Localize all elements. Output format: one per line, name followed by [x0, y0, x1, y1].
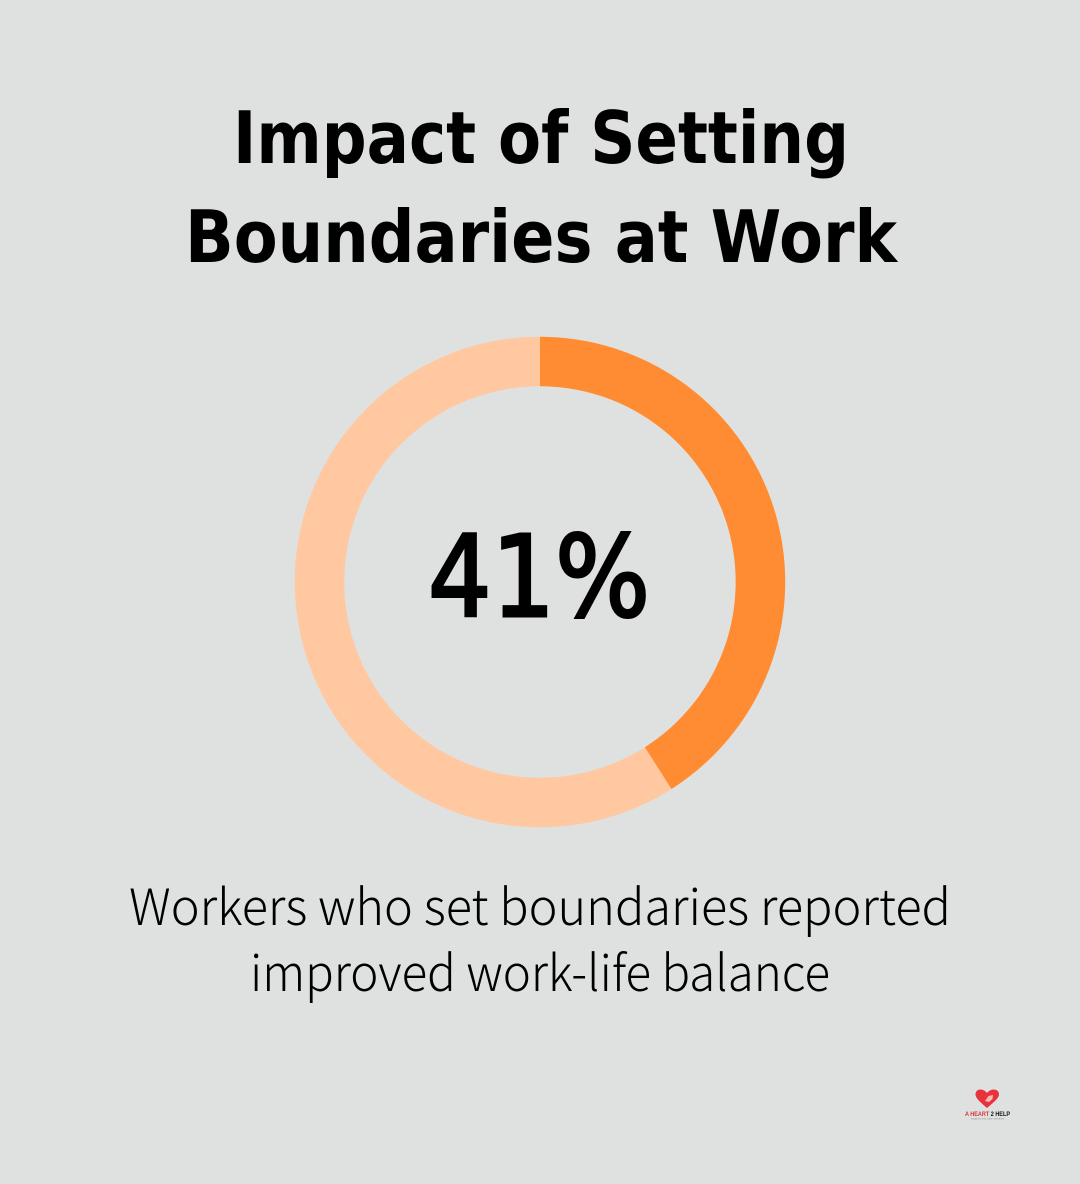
logo wordmark: A HEART 2 HELP [965, 1112, 1010, 1118]
center value: 41% [428, 513, 650, 643]
title: Boundaries at Work [185, 195, 899, 279]
description [129, 868, 951, 1006]
donut chart: 41% [320, 362, 760, 802]
icon: heart with hands [976, 1090, 999, 1108]
description: improved work-life balance [250, 934, 830, 1006]
title [185, 96, 899, 279]
logo tagline: support and care services [971, 1118, 1005, 1120]
donut track: remaining share [320, 362, 760, 802]
logo: A Heart 2 Help [965, 1090, 1010, 1120]
title: Impact of Setting [233, 96, 849, 180]
donut segment: 41% [540, 362, 760, 768]
description: Workers who set boundaries reported [129, 868, 951, 940]
